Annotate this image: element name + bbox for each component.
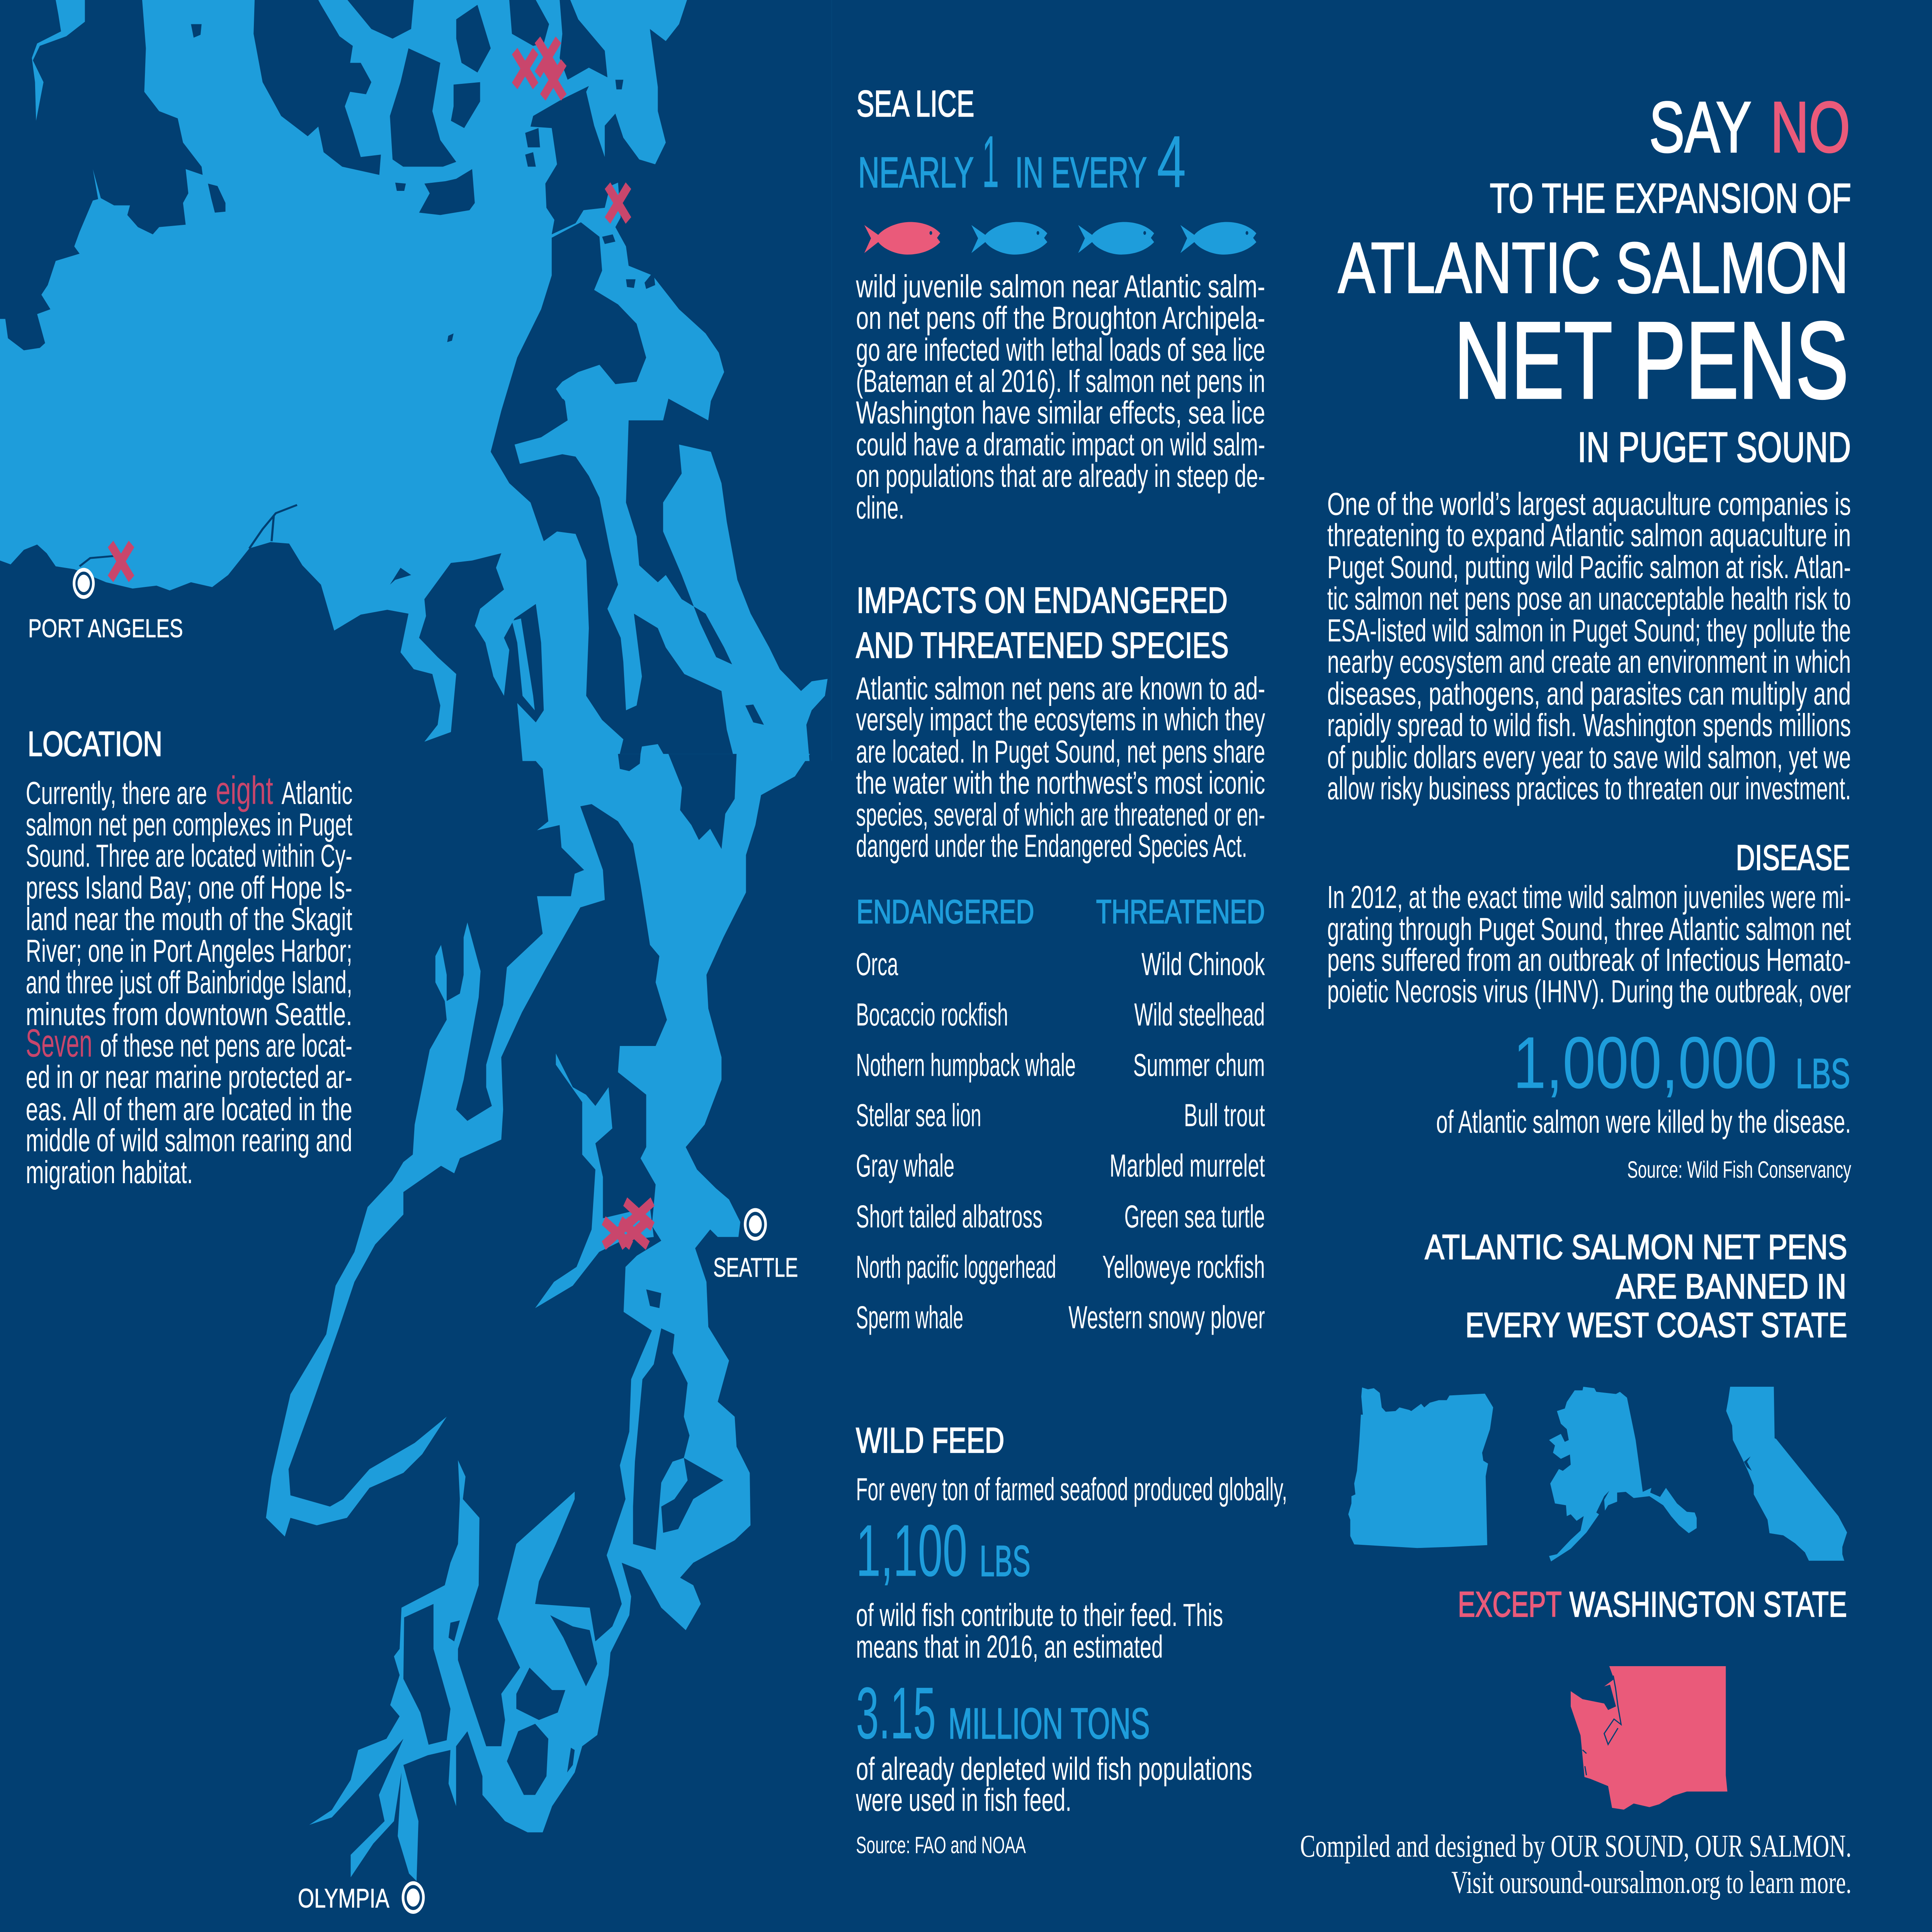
text block: introduction: threatening to expand Atlantic salmon aquaculture in [1327,518,1851,553]
text block: impacts: the water with the northwest’s most iconic [856,765,1265,801]
text block: introduction: allow risky business practices to threaten our investment. [1327,771,1851,806]
statistic: nearly 1 in every 4: 4 [1157,121,1186,203]
title: IN PUGET SOUND [1578,424,1851,471]
net pen marker: Port Angeles [111,544,131,579]
text block: introduction: Puget Sound, putting wild Pacific salmon at risk. Atlan- [1327,549,1851,585]
text block: sea lice: on net pens off the Broughton Archipela- [856,300,1265,336]
text block: location: River; one in Port Angeles Harbor; [26,933,352,969]
text block: sea lice: could have a dramatic impact on wild salm- [856,427,1265,463]
text block: disease: poietic Necrosis virus (IHNV). During the outbreak, over [1327,974,1851,1010]
text block: introduction [1327,486,1851,806]
statistic: 3.15 million tons: 3.15 [856,1672,936,1754]
heading: except Washington state [1458,1584,1847,1624]
heading: disease: DISEASE [1736,838,1850,878]
text block: disease: pens suffered from an outbreak of Infectious Hemato- [1327,942,1851,978]
city marker: Port Angeles [74,570,94,597]
icon: blue fish 3 [1180,222,1256,255]
statistic: 3.15 million tons [856,1672,1150,1754]
text block: introduction: tic salmon net pens pose an unacceptable health risk to [1327,581,1851,617]
list: threatened species: Marbled murrelet [1110,1148,1265,1184]
title: NET PENS [1454,299,1849,421]
text block: feed end [855,1751,1252,1818]
icon: California [1726,1387,1847,1561]
city marker: Seattle [745,1210,765,1239]
panel: location [26,724,352,1190]
list: threatened species: Wild steelhead [1134,997,1265,1032]
icon: Alaska [1549,1387,1697,1561]
title: ATLANTIC SALMON [1338,228,1849,308]
statistic: 1,100 lbs: LBS [980,1537,1031,1585]
text block: disease [1327,879,1851,1010]
heading: impacts: IMPACTS ON ENDANGERED [857,580,1228,621]
text block: introduction: One of the world’s largest aquaculture companies is [1327,486,1851,522]
text block: introduction: rapidly spread to wild fish. Washington spends millions [1327,707,1851,743]
text block: sea lice: (Bateman et al 2016). If salmon net pens in [856,364,1265,399]
text block: killed by disease: of Atlantic salmon were killed by the disease. [1436,1104,1851,1140]
list: endangered species: Nothern humpback whale [856,1047,1076,1083]
list: threatened species: Wild Chinook [1141,947,1265,982]
list: endangered species: Stellar sea lion [856,1098,981,1133]
text block: sea lice: wild juvenile salmon near Atlantic salm- [855,269,1265,304]
label: Olympia: OLYMPIA [298,1883,389,1913]
label: Port Angeles: PORT ANGELES [28,614,183,643]
statistic: 1,000,000 lbs: LBS [1796,1050,1850,1097]
city marker: Olympia [403,1883,423,1912]
text block: location [26,768,352,1190]
text block: impacts: species, several of which are threatened or en- [856,797,1265,833]
heading: impacts [856,580,1229,666]
list: endangered species: Sperm whale [856,1299,963,1335]
statistic: nearly 1 in every 4 [858,121,1186,203]
icon: Oregon [1348,1388,1493,1548]
icon: pink fish [864,222,940,255]
text block: feed intro: For every ton of farmed seafood produced globally, [856,1471,1287,1507]
icon: blue fish 2 [1078,222,1154,255]
title: SAY [1649,87,1752,168]
text block: location: eas. All of them are located in the [26,1092,352,1127]
text block: feed middle [856,1597,1223,1665]
heading: impacts: AND THREATENED SPECIES [856,625,1229,666]
text block: feed middle: means that in 2016, an estimated [856,1629,1163,1665]
label: Seattle: SEATTLE [713,1252,798,1282]
text block: sea lice: go are infected with lethal loads of sea lice [856,332,1265,368]
heading: wild feed: WILD FEED [856,1420,1004,1460]
text block: feed end: were used in fish feed. [855,1782,1071,1818]
text block: disease: grating through Puget Sound, three Atlantic salmon net [1327,911,1851,947]
list: endangered species: Bocaccio rockfish [856,997,1008,1032]
heading: location: LOCATION [28,724,162,764]
text block: location: press Island Bay; one off Hope Is- [26,870,352,906]
statistic: 1,100 lbs: 1,100 [856,1509,967,1592]
text block: location: salmon net pen complexes in Puget [26,807,352,842]
panel: disease [1327,838,1852,1183]
statistic: nearly 1 in every 4: IN EVERY [1015,148,1147,197]
heading: banned: EVERY WEST COAST STATE [1465,1305,1847,1344]
panel: wild feed [855,1420,1287,1859]
text block: impacts: are located. In Puget Sound, net pens share [856,734,1265,770]
heading: banned [1425,1227,1847,1344]
statistic: nearly 1 in every 4: NEARLY [858,148,974,197]
text block: impacts: Atlantic salmon net pens are known to ad- [856,671,1265,706]
text block: introduction: diseases, pathogens, and parasites can multiply and [1327,676,1851,712]
panel: impacts on endangered and threatened species [856,580,1265,1335]
source: FAO and NOAA: Source: FAO and NOAA [856,1832,1026,1859]
text block: sea lice: on populations that are already in steep de- [856,458,1265,494]
text block: introduction: of public dollars every year to save wild salmon, yet we [1327,740,1851,776]
heading: banned: ATLANTIC SALMON NET PENS [1425,1227,1847,1266]
net pen markers: Bainbridge Island [604,1202,653,1246]
text block: location: minutes from downtown Seattle. [26,997,352,1032]
list: threatened species: Green sea turtle [1124,1199,1265,1235]
text block: location: Currently, there are [26,776,207,811]
statistic: nearly 1 in every 4: 1 [982,121,999,203]
list: endangered species: North pacific loggerhead [856,1249,1056,1285]
text block: location: ed in or near marine protected ar- [26,1060,352,1095]
list: threatened species: Bull trout [1184,1098,1265,1133]
statistic: 3.15 million tons: MILLION TONS [948,1699,1150,1748]
source: Wild Fish Conservancy: Source: Wild Fish Conservancy [1627,1157,1852,1183]
credit: Visit oursound-oursalmon.org to learn more. [1451,1865,1852,1900]
text block: sea lice: cline. [856,490,904,526]
text block: location: of these net pens are locat- [100,1028,352,1064]
panel: sea lice [855,83,1265,526]
net pen markers: Cypress Island Bay [515,40,564,97]
icon: Washington state [1571,1666,1727,1810]
panel: banned in every west coast state [1348,1227,1847,1810]
statistic: 1,000,000 lbs: 1,000,000 [1513,1022,1777,1104]
heading: banned: ARE BANNED IN [1616,1267,1846,1306]
credit [1300,1828,1852,1900]
text block: feed middle: of wild fish contribute to their feed. This [856,1597,1223,1633]
text block: location: Sound. Three are located within Cy- [26,838,352,874]
text block: location: Atlantic [281,776,352,811]
list: threatened species: Yelloweye rockfish [1102,1249,1265,1285]
list: threatened species: THREATENED [1096,893,1265,930]
list: endangered species [856,893,1076,1335]
text block: introduction: nearby ecosystem and create an environment in which [1327,644,1851,680]
list: threatened species [1068,893,1265,1335]
icon: blue fish 1 [971,222,1047,255]
heading: except Washington state: EXCEPT [1458,1584,1562,1624]
text block: location: middle of wild salmon rearing and [26,1123,352,1158]
heading: except Washington state: WASHINGTON STATE [1570,1584,1847,1624]
text block: location: Seven [26,1021,92,1065]
map: southern sound and Hood Canal [266,754,810,1881]
list: endangered species: Gray whale [856,1148,954,1184]
list: endangered species: ENDANGERED [857,893,1034,930]
text block: location: land near the mouth of the Skagit [26,901,352,937]
text block: location: migration habitat. [26,1155,193,1190]
text block: sea lice: Washington have similar effects, sea lice [856,395,1265,431]
net pen marker: Hope Island [607,185,628,221]
text block: disease: In 2012, at the exact time wild salmon juveniles were mi- [1327,879,1851,915]
text block: impacts: versely impact the ecosytems in which they [856,702,1265,738]
list: threatened species: Summer chum [1133,1047,1265,1083]
title: NO [1770,87,1850,168]
heading: sea lice: SEA LICE [857,83,975,124]
text block: location: eight [216,768,273,812]
list: endangered species: Orca [856,947,898,982]
text block: impacts [856,671,1265,864]
map: northern waters [0,0,832,761]
text block: location: and three just off Bainbridge Island, [26,965,352,1000]
list: threatened species: Western snowy plover [1068,1299,1265,1335]
statistic: 1,000,000 lbs [1513,1022,1850,1104]
title [1338,87,1851,471]
title: TO THE EXPANSION OF [1490,175,1851,221]
text block: impacts: dangerd under the Endangered Species Act. [856,828,1247,864]
text block: feed end: of already depleted wild fish populations [856,1751,1252,1787]
text block: introduction: ESA-listed wild salmon in Puget Sound; they pollute the [1327,613,1851,648]
map of Puget Sound [0,0,832,1913]
list: endangered species: Short tailed albatross [856,1199,1043,1235]
text block: sea lice [855,269,1265,526]
credit: Compiled and designed by OUR SOUND, OUR SALMON. [1300,1828,1852,1864]
